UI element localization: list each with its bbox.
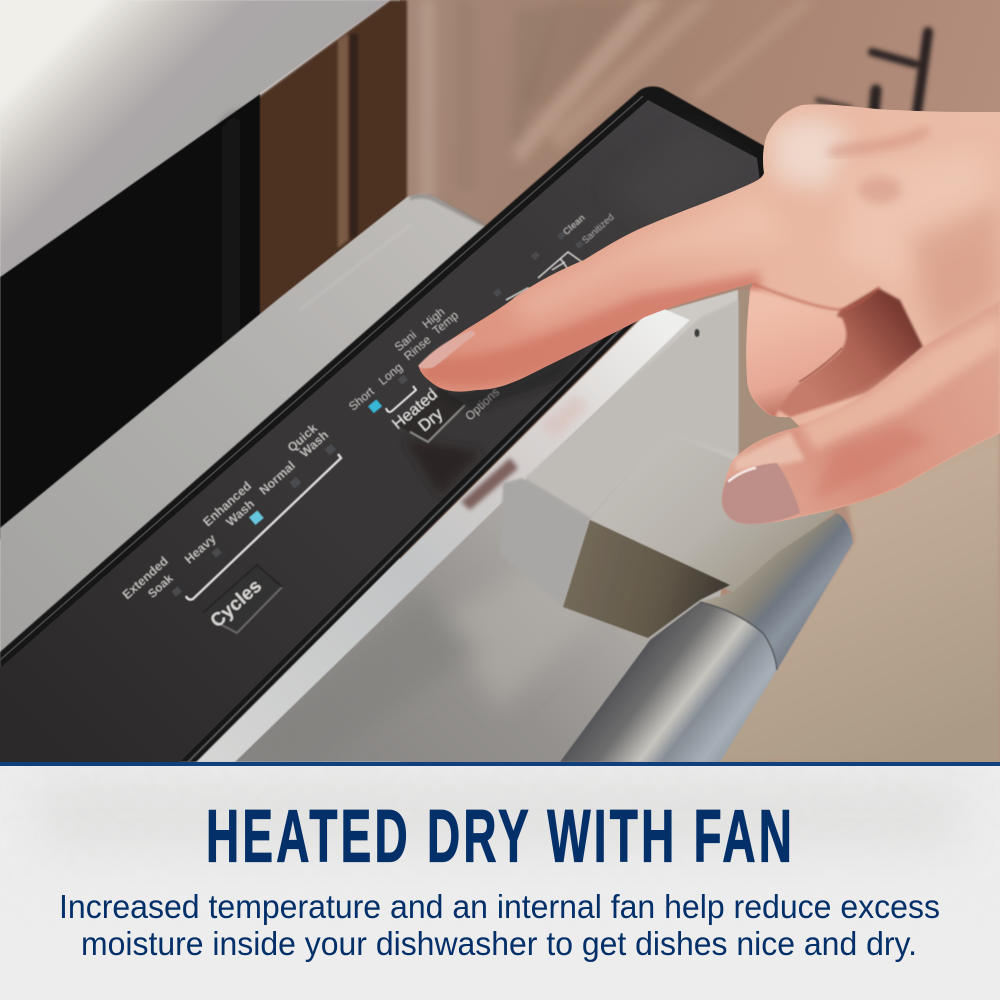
curled middle finger [746, 290, 846, 418]
bracket top plate [590, 432, 835, 593]
cycles labels: Extended [120, 554, 171, 602]
control panel [0, 86, 772, 762]
upper labels: Clean [561, 212, 588, 238]
stainless door top [0, 194, 500, 680]
description text [59, 888, 940, 962]
panel glass reflection [610, 130, 745, 230]
door reflection light area [525, 300, 738, 518]
finger crease [799, 348, 842, 382]
door screw [694, 329, 700, 337]
handle lower section [560, 602, 777, 762]
option labels: Rinse [401, 333, 434, 363]
description text: Increased temperature and an internal fan help reduce excess [59, 888, 940, 925]
countertop [0, 0, 390, 277]
option labels: Long [376, 360, 405, 388]
wood cabinet background [400, 0, 1000, 770]
silver strip under panel [196, 305, 690, 762]
status lights [171, 231, 584, 597]
index fingernail [418, 331, 475, 368]
hand [418, 104, 1000, 524]
door front [196, 290, 738, 762]
knuckle highlight [770, 115, 850, 190]
caption panel background [52, 766, 1000, 844]
cycles selector line [186, 454, 341, 600]
thumb redness [818, 426, 924, 496]
strip reflection of fingers [461, 395, 590, 510]
thumb [722, 300, 1000, 524]
upper labels [561, 212, 617, 246]
cycles labels: Heavy [182, 531, 219, 567]
panel shadow under finger [440, 335, 600, 410]
palm shade [910, 200, 1000, 340]
floor area lower right [715, 420, 1000, 762]
finger top highlight [516, 209, 768, 320]
option labels: Temp [430, 308, 461, 338]
option labels: Sani [392, 328, 419, 354]
handle upper section [700, 513, 853, 670]
back of hand highlight [847, 161, 982, 272]
cycles labels: Soak [145, 571, 176, 601]
dishwasher dark opening [0, 94, 260, 540]
dark palm gap [770, 288, 923, 417]
cycles labels: Normal [257, 458, 298, 498]
thumb highlight [800, 315, 1000, 450]
thumb tip light [735, 432, 805, 470]
thumbnail [722, 463, 800, 524]
cycles labels: Enhanced [200, 479, 254, 529]
door shading [230, 560, 600, 762]
heated dry button: Dry [415, 405, 447, 435]
door handle [560, 513, 853, 762]
upper labels: Sanitized [580, 212, 617, 246]
option labels: High [419, 305, 447, 331]
option labels: Short [346, 384, 377, 414]
cycles labels: Wash [223, 497, 257, 529]
handle bracket [500, 300, 835, 638]
finger underside shading [419, 272, 760, 386]
knuckle redness [858, 176, 902, 204]
upper icon buttons [506, 252, 582, 300]
cycles button: Cycles [207, 576, 266, 632]
black cabinet handle [818, 32, 928, 112]
wood grain streaks [420, 0, 815, 200]
option labels [346, 305, 502, 423]
heated dry button: Heated [389, 385, 441, 433]
cycles labels: Wash [297, 428, 331, 460]
heated dry selector line [386, 386, 416, 412]
heated dry button [389, 385, 465, 442]
description text: moisture inside your dishwasher to get dishes nice and dry. [81, 925, 917, 962]
cycles button [203, 565, 282, 633]
vein redness [829, 130, 928, 152]
cycles labels [120, 421, 331, 602]
title: HEATED DRY WITH FAN [206, 795, 792, 878]
cycles labels: Quick [285, 421, 320, 455]
bracket side face [500, 478, 590, 607]
product photo: dishwasher control panel [0, 0, 1000, 770]
bracket dark front [563, 520, 730, 638]
option labels: Options [462, 385, 502, 423]
brown interior cabinet [258, 0, 407, 322]
finger base fold [753, 284, 880, 310]
blue divider bar [0, 762, 1000, 766]
